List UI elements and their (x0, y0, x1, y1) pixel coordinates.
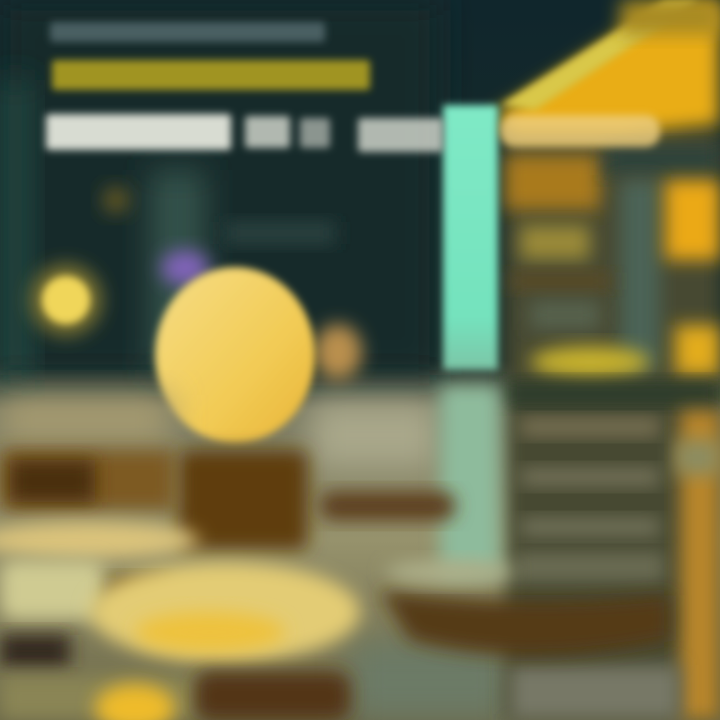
heading: white line (46, 114, 660, 152)
coins pile left (0, 395, 200, 720)
small orange glow (102, 186, 130, 214)
icon: large gold coin (155, 267, 362, 443)
icon: small glowing coin (30, 264, 102, 336)
large coin foreground (90, 562, 360, 720)
mint glass column (443, 105, 498, 370)
heading: yellow line (52, 60, 370, 90)
purple glow (161, 250, 209, 286)
dim subtitle text (225, 222, 335, 244)
bowl on the right (380, 560, 670, 655)
coin stack pedestal (178, 450, 455, 550)
heading: small top line (50, 22, 325, 42)
shop interior on right (495, 0, 720, 720)
mint column reflection (440, 385, 500, 575)
